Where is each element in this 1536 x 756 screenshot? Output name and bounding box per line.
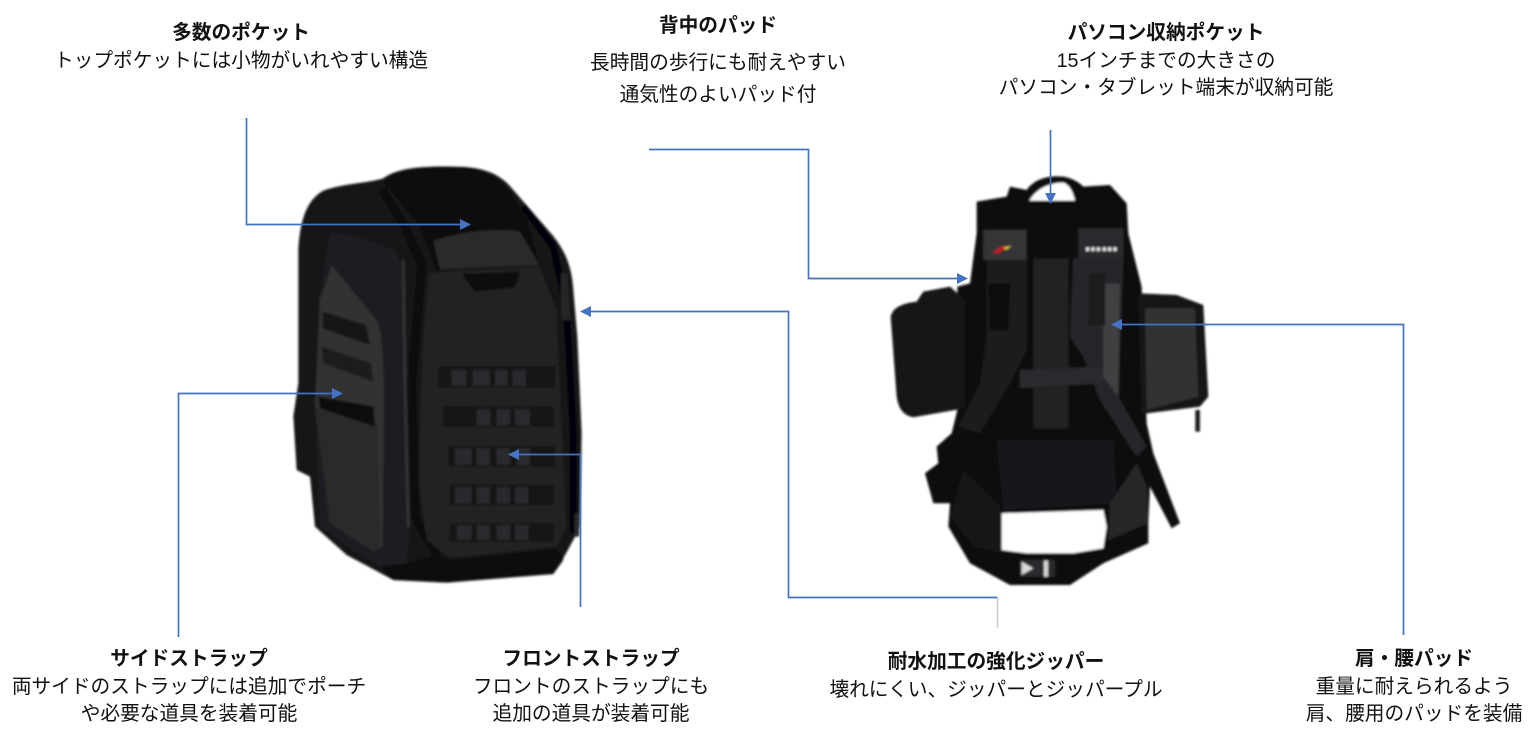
- callout: side strap: 両サイドのストラップには追加でポーチ: [12, 676, 366, 698]
- callout: shoulder and waist pad: 肩・腰パッド: [1355, 648, 1473, 670]
- front webbing: [438, 367, 555, 542]
- right pouch: [1138, 293, 1208, 414]
- center padding: [1027, 202, 1073, 255]
- side straps: [323, 312, 370, 345]
- front panel: [418, 267, 567, 558]
- zipper pull: [561, 273, 571, 320]
- zipper edges: [382, 188, 437, 555]
- callout: PC pocket: パソコン収納ポケット: [1068, 22, 1264, 44]
- arrow: shoulder and waist pad: [1111, 319, 1404, 635]
- callout: back pad: [590, 14, 846, 106]
- photo: front view of black backpack: [293, 167, 582, 583]
- chest strap: [1020, 367, 1103, 388]
- callout: front strap: [473, 648, 709, 725]
- callout: front strap: 追加の道具が装着可能: [493, 703, 689, 725]
- callout: PC pocket: [999, 22, 1333, 99]
- handle inner: [1029, 183, 1075, 201]
- shoulder strap labels: [983, 230, 1027, 260]
- callout: front strap: フロントストラップ: [502, 648, 680, 670]
- callout: back pad: 長時間の歩行にも耐えやすい: [590, 52, 846, 74]
- callout: waterproof zipper: 壊れにくい、ジッパーとジッパープル: [829, 679, 1163, 701]
- callout: waterproof zipper: 耐水加工の強化ジッパー: [888, 651, 1104, 673]
- callout: side strap: サイドストラップ: [110, 648, 268, 670]
- base: [380, 548, 563, 583]
- back silhouette: [925, 176, 1180, 585]
- callout: many pockets: 多数のポケット: [172, 22, 310, 44]
- callout: PC pocket: パソコン・タブレット端末が収納可能: [999, 77, 1333, 99]
- waist opening: [1002, 510, 1107, 553]
- arrow: waterproof zipper: [580, 306, 998, 628]
- callout: shoulder and waist pad: 重量に耐えられるよう: [1316, 676, 1512, 698]
- callout: many pockets: [54, 22, 428, 72]
- hip pads: [950, 470, 1002, 553]
- arrow: front strap: [508, 449, 580, 607]
- lumbar pad: [997, 440, 1117, 510]
- brand mark: [1086, 247, 1117, 251]
- shoulder straps: [958, 260, 1027, 433]
- arrow: back pad: [649, 150, 968, 284]
- callout: waterproof zipper: [829, 650, 1163, 701]
- callout: many pockets: トップポケットには小物がいれやすい構造: [54, 50, 428, 72]
- callout: back pad: 背中のパッド: [659, 15, 777, 37]
- buckle: [1020, 560, 1055, 577]
- callout: side strap: [12, 648, 366, 725]
- side pocket with strap panel: [315, 265, 384, 552]
- callout: side strap: や必要な道具を装着可能: [81, 703, 297, 725]
- upper side panel: [315, 233, 412, 567]
- callout: PC pocket: 15インチまでの大きさの: [1057, 50, 1275, 72]
- top pocket: [383, 168, 540, 270]
- arrow: PC pocket: [1045, 130, 1056, 204]
- callout: back pad: 通気性のよいパッド付: [620, 84, 816, 106]
- photo: back view of black backpack with side pouches: [891, 176, 1208, 585]
- callout: shoulder and waist pad: 肩、腰用のパッドを装備: [1306, 703, 1522, 725]
- lower side pocket: [315, 407, 380, 552]
- arrow: side strap: [178, 388, 343, 637]
- handle slot: [462, 272, 520, 292]
- backpack silhouette: [293, 167, 582, 583]
- left pouch: [891, 287, 965, 417]
- callout: shoulder and waist pad: [1306, 648, 1522, 725]
- callout: front strap: フロントのストラップにも: [473, 676, 709, 698]
- arrow: many pockets: [246, 118, 471, 230]
- logo: [993, 246, 1012, 253]
